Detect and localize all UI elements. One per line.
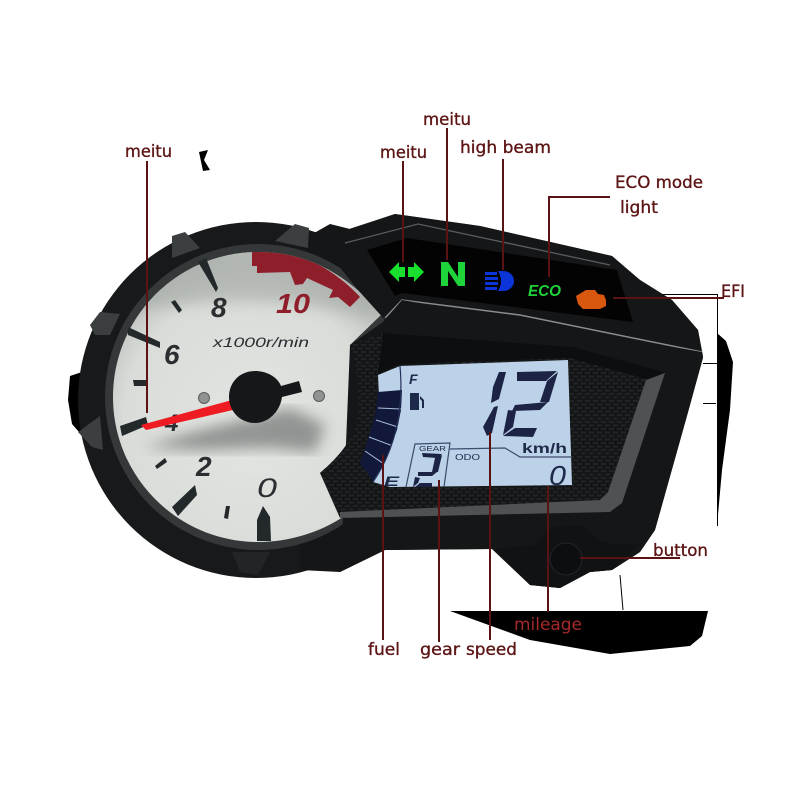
carbon display panel — [320, 333, 665, 518]
gear box — [406, 443, 450, 487]
callout: neutral: meitu — [423, 110, 471, 130]
upper visor and warning light window — [318, 214, 703, 588]
callout: turn signal — [380, 143, 427, 262]
needle hub — [229, 371, 302, 423]
button housing — [495, 525, 640, 588]
bezel lugs — [78, 224, 309, 575]
fuel labels — [384, 371, 418, 489]
dial numerals — [164, 288, 310, 503]
tick marks — [120, 258, 271, 541]
screws — [198, 390, 324, 404]
gauge bezel ring — [105, 244, 411, 550]
odometer value: 0 — [549, 460, 566, 491]
callout: EFI: EFI — [721, 282, 745, 302]
speed unit: km/h — [522, 440, 567, 456]
dial numerals: 10 — [276, 288, 310, 319]
display gray surround — [340, 373, 665, 518]
icon: turn signal arrows — [389, 262, 424, 282]
divider line — [450, 448, 572, 457]
fuel labels: F — [409, 371, 418, 387]
round gauge housing — [78, 222, 434, 578]
callout: ECO mode light: light — [620, 198, 658, 218]
callout: turn signal: meitu — [380, 143, 427, 163]
outer housing — [300, 214, 703, 588]
speed digits — [483, 371, 558, 437]
callout: high beam — [460, 138, 551, 270]
callout: speed: speed — [466, 640, 517, 660]
icon: engine warning — [576, 290, 606, 309]
needle — [141, 400, 233, 430]
fuel pump icon — [410, 393, 424, 410]
gear digit — [413, 453, 442, 487]
background artifacts: black cut-out shadows — [68, 150, 733, 654]
callout: ECO mode light — [549, 173, 703, 277]
callout: button — [580, 541, 708, 561]
icon: neutral N — [441, 262, 465, 286]
callout: EFI — [613, 282, 745, 302]
red zone — [252, 252, 360, 307]
dial numerals: 8 — [211, 292, 227, 323]
callout: button: button — [653, 541, 708, 561]
dial numerals: 0 — [257, 473, 277, 503]
callout: tachometer: meitu — [125, 142, 172, 162]
dial numerals: 4 — [164, 410, 178, 437]
tachometer dial — [113, 252, 381, 542]
instrument cluster body — [78, 214, 703, 588]
callout: mileage: mileage — [514, 615, 582, 635]
dial numerals: 2 — [195, 451, 212, 482]
callout: fuel: fuel — [368, 640, 400, 660]
LCD screen: GEAR — [419, 446, 446, 453]
fuel labels: E — [384, 473, 400, 489]
icon: high beam — [485, 271, 514, 291]
dial numerals: x1000r/min — [212, 334, 309, 350]
odometer label: ODO — [455, 452, 480, 462]
LCD screen — [360, 360, 572, 491]
icon: ECO text: ECO — [528, 283, 562, 300]
callout: high beam: high beam — [460, 138, 551, 158]
dial numerals: 6 — [164, 339, 180, 370]
callout: ECO mode light: ECO mode — [615, 173, 703, 193]
fuel bar — [360, 390, 402, 481]
callout: gear: gear — [420, 640, 460, 660]
